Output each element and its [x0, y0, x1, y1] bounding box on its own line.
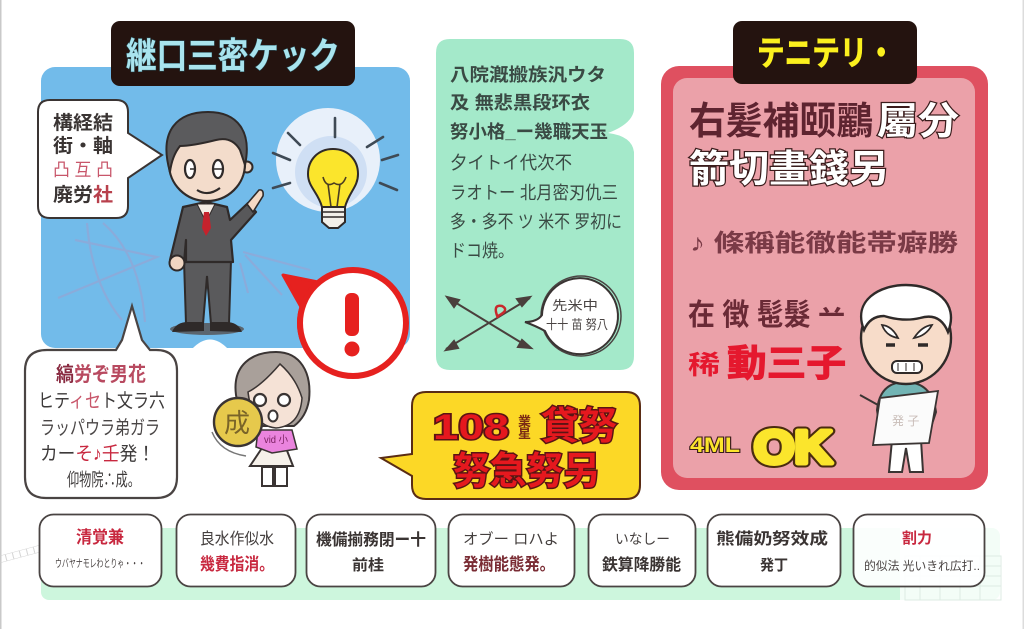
OK label: 4ML: [690, 434, 740, 457]
callout: lower left speech bubble: ラッパウラ弟ガラ: [40, 417, 160, 439]
callout: round bubble: 十十 苗 努八: [546, 317, 608, 332]
card 5: [588, 514, 696, 586]
card 1: ウバヤナモレわとりゃ・・・: [55, 557, 145, 570]
icon: girl holding coin: [212, 352, 309, 486]
icon: girl holding coin: 成: [224, 408, 250, 438]
card 6: 発丁: [760, 556, 788, 574]
icon: girl holding coin: vid 小: [264, 434, 288, 446]
green panel paragraph: 夕イトイ代次不: [450, 153, 572, 173]
green panel paragraph: [450, 64, 622, 261]
green panel paragraph: ラオトー 北月密刃仇三: [450, 183, 618, 203]
callout: man's speech bubble: 凸 互 凸: [53, 160, 113, 180]
card 7: 的似法 光いきれ広打..: [864, 558, 980, 573]
card 3: 前桂: [352, 556, 384, 574]
green panel paragraph: 多・多不 ツ 米不 罗初に: [450, 212, 622, 232]
red emphasis line: 稀: [688, 350, 720, 380]
card 6: [708, 514, 840, 586]
faint sketch lines: [58, 223, 310, 322]
heading: yellow title: [733, 21, 917, 84]
green panel paragraph: ドコ焼。: [450, 241, 514, 261]
summary headline: [689, 101, 959, 191]
callout: lower left speech bubble: 縞労ぞ男花: [56, 363, 146, 386]
summary headline: 屬分: [877, 101, 959, 143]
red emphasis line: 動三子: [727, 343, 846, 384]
callout: man's speech bubble: [38, 100, 162, 218]
panel: red summary panel: [661, 66, 988, 490]
heading: yellow title: テニテリ・: [757, 35, 895, 73]
callout: yellow 108 bubble: 星: [518, 426, 531, 441]
callout: round bubble: [525, 276, 621, 356]
callout: yellow 108 bubble: 貸努: [541, 406, 617, 448]
card 2: 幾費指消。: [200, 555, 274, 574]
card 7: 割力: [902, 530, 932, 547]
green panel paragraph: 及 無悲黒段环衣: [450, 93, 590, 113]
card 3: 機備揃務閉ー十: [316, 530, 426, 549]
noise watermark patch: [905, 556, 1001, 600]
green panel paragraph: 八院漑搬族汎ウタ: [450, 64, 606, 85]
OK label: OK: [754, 421, 832, 473]
callout: lower left speech bubble: ヒティセト文ラ六: [38, 390, 165, 412]
heading: check title: [111, 21, 355, 86]
callout: yellow 108 bubble: 108: [433, 408, 509, 447]
summary subline: ♪ 條稱能徹能帯癖勝: [690, 230, 958, 257]
summary detail line: 在 徴 髢髮 䒑: [688, 299, 845, 332]
card 7: [854, 514, 984, 586]
card 4: 発樹能態発。: [463, 554, 555, 574]
summary headline: 右髪補颐鸝: [689, 101, 873, 143]
icon: grumpy man with paper: 発 子: [892, 414, 919, 428]
icon: red exclamation bubble: [283, 270, 406, 376]
heading: check title: 継口三密ケック: [126, 35, 340, 76]
summary headline: 箭切畫錢另: [689, 149, 889, 191]
card 2: [176, 514, 296, 586]
callout: yellow 108 bubble: [381, 392, 640, 499]
icon: businessman in suit: [166, 112, 263, 335]
callout: man's speech bubble: 構経結: [53, 112, 113, 134]
panel: bottom mint band: [41, 528, 1002, 602]
card 1: [40, 514, 162, 586]
card 5: いなしー: [615, 531, 670, 547]
panel: green explanation panel: [436, 39, 634, 370]
card 4: [448, 514, 574, 586]
icon: grumpy man with paper: [860, 285, 951, 472]
callout: man's speech bubble: 廃労社: [53, 183, 113, 206]
card 5: 鉄算降勝能: [602, 555, 681, 574]
callout: lower left speech bubble: 仰物院∴成。: [67, 470, 140, 490]
icon: light bulb: [273, 108, 398, 228]
callout: lower left speech bubble: カーそ♪壬発！: [40, 443, 155, 465]
callout: lower left speech bubble: [25, 306, 177, 498]
card 2: 良水作似水: [200, 530, 274, 548]
panel: blue check panel: [41, 67, 410, 349]
callout: yellow 108 bubble: 努急努另: [453, 451, 600, 493]
callout: man's speech bubble: 街・軸: [53, 135, 113, 157]
callout: round bubble: 先米中: [552, 298, 598, 313]
icon: crossed arrows: [446, 297, 531, 350]
OK label: [690, 421, 832, 473]
OK label: OK: [754, 421, 832, 473]
card 6: 熊備奶努效成: [716, 529, 828, 548]
card 3: [306, 514, 436, 586]
green panel paragraph: 努小格_ー幾職天玉: [450, 122, 608, 142]
card 1: 清覚兼: [76, 527, 124, 547]
callout: yellow 108 bubble: 業: [518, 414, 531, 429]
card 4: オブー ロハよ: [463, 530, 559, 548]
